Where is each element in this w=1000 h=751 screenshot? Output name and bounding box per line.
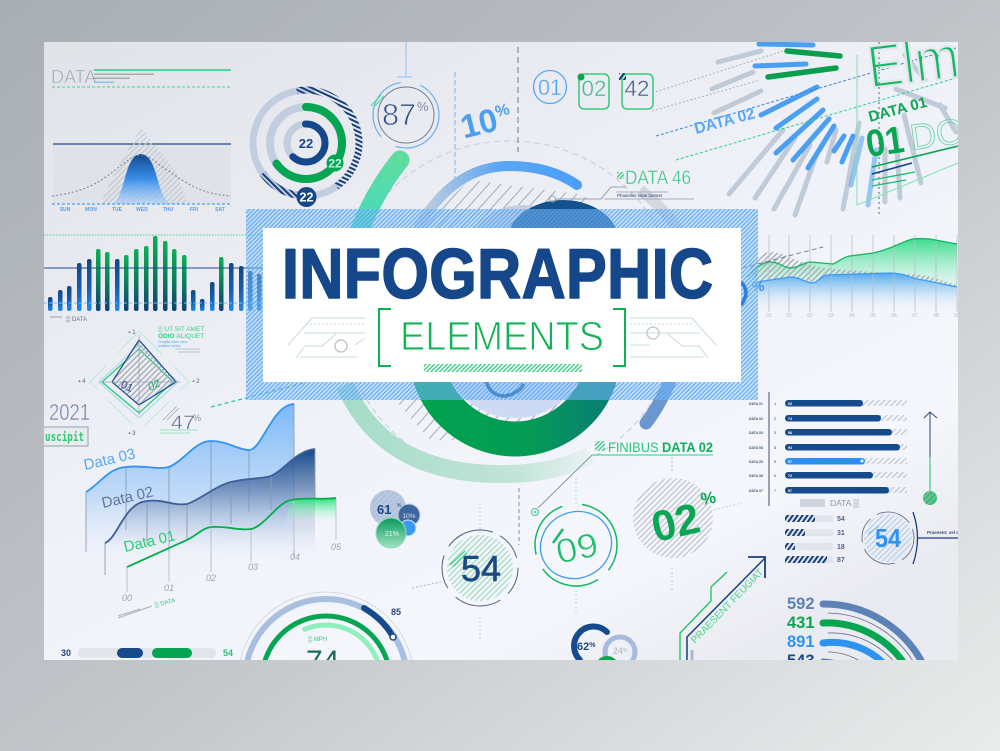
gauge: 87%: %	[417, 99, 429, 114]
vertical arrow	[923, 412, 937, 505]
gauge: 09: 09	[553, 526, 602, 572]
bell curve chart: SAT	[215, 207, 225, 213]
line chart: right: 07	[912, 313, 918, 319]
caption: ut sit amet: ▒ UT SIT AMET	[158, 325, 204, 333]
horizontal bar list: 86	[788, 431, 792, 435]
label: DATA 46 with circuit: Phasellus vitae laoreet	[617, 193, 663, 198]
stat: 47%: 47	[171, 413, 195, 434]
donut chart: 22: 22	[299, 136, 313, 151]
horizontal bar list: 6	[774, 473, 777, 478]
3d area chart: 01	[164, 583, 174, 593]
horizontal bar list: 57	[788, 460, 792, 464]
gauge: 09	[534, 478, 618, 612]
line chart: right: 09	[954, 313, 960, 319]
hatched mini bars: 18	[837, 544, 845, 551]
line chart: right: 03	[828, 313, 834, 319]
gauge: 74	[240, 592, 412, 660]
3d area chart: 02	[206, 573, 216, 583]
dashed diagonal green	[676, 78, 956, 160]
bell curve chart: SUN	[60, 207, 71, 213]
hatched mini bars: 87	[837, 557, 845, 564]
3d area chart: 00	[122, 593, 132, 603]
hatched title band	[246, 209, 758, 400]
caption: ut sit amet	[158, 325, 204, 352]
radial list: 592 431 891 543	[787, 595, 925, 690]
horizontal bar list: 63	[788, 402, 792, 406]
small data tag: ▒ DATA	[154, 597, 176, 609]
dashed diagonal gray	[652, 51, 783, 111]
stat: 2021: 2021	[49, 399, 90, 425]
radar chart: ▪ 4	[78, 379, 86, 385]
radial list: 592 431 891 543: 543	[787, 652, 815, 670]
horizontal bar list: 87	[788, 489, 792, 493]
3d area chart: 04	[290, 552, 300, 562]
gray guide below rings	[518, 488, 520, 545]
line chart: right: %	[752, 278, 765, 294]
title card	[263, 228, 741, 382]
radar chart: 02	[146, 378, 162, 394]
label: FINIBUS DATA 02: FINIBUS DATA 02	[608, 439, 713, 455]
badges: 01 02 42	[534, 70, 653, 109]
stat: 02%: 02	[647, 494, 704, 552]
horizontal bar list: DATA 07	[749, 489, 763, 493]
horizontal bar list: 93	[788, 446, 792, 450]
line chart: right: 01	[786, 313, 792, 319]
title: INFOGRAPHIC: INFOGRAPHIC	[282, 234, 713, 313]
label: FINIBUS DATA 02	[532, 439, 713, 516]
caption: ut sit amet: porttitor metus	[158, 344, 181, 348]
bubbles: 61 10 21	[370, 490, 420, 548]
gauges: 62% 24%	[571, 624, 638, 660]
horizontal bar list: DATA 05	[749, 460, 763, 464]
horizontal bar list: 7	[774, 488, 777, 493]
stat: 47%	[160, 406, 201, 434]
bell curve chart: WED	[136, 207, 148, 213]
horizontal bar list: 74	[788, 417, 792, 421]
horizontal bar list: 5	[774, 459, 777, 464]
stat: 47%: %	[193, 413, 201, 423]
line chart: right: 05	[870, 313, 876, 319]
progress bar: 30 to 54: 30	[61, 648, 71, 658]
gauge: 74: 74	[306, 645, 339, 678]
3d area chart: 05	[331, 542, 342, 552]
radar chart	[78, 330, 200, 437]
bubbles: 61 10 21: 10%	[402, 513, 416, 520]
gauges: 62% 24%: 62	[577, 641, 589, 653]
label: DATA 01 block: 01	[863, 119, 907, 166]
line chart: right: 02	[807, 313, 813, 319]
big label: Elm: Elm	[863, 23, 963, 101]
label: DATA 46 with circuit: DATA 46	[625, 168, 691, 189]
subtitle: ELEMENTS	[379, 309, 625, 372]
progress bar: 30 to 54: 54	[223, 648, 233, 658]
gauge: 74: ▒ MPH	[308, 636, 327, 643]
gauges: 62% 24%: 24	[613, 646, 623, 656]
tag: uscipit: uscipit	[45, 430, 84, 444]
bar chart: left weekly bars	[44, 235, 263, 323]
central concentric rings	[341, 141, 685, 479]
label: DATA 01 block: DOC	[907, 106, 992, 158]
radial list: 592 431 891 543: 891	[787, 633, 815, 651]
horizontal bar list: 1	[774, 401, 777, 406]
gauge: 54 left: 54	[461, 548, 501, 589]
stat: 10%: 10	[457, 101, 501, 145]
bubbles: 61 10 21: 61	[377, 502, 391, 517]
subtitle: ELEMENTS: ELEMENTS	[400, 313, 604, 359]
arrow: PRAESENT FEUGIAT: PRAESENT FEUGIAT	[689, 567, 766, 646]
horizontal bar list: DATA 01	[749, 402, 763, 406]
dashed diagonals	[656, 48, 956, 136]
stat: 02%	[633, 457, 742, 590]
label: DATA 02: DATA 02	[693, 105, 757, 138]
hatched mini bars	[785, 515, 845, 564]
circuit ornament left	[288, 318, 365, 358]
hatched mini bars: 54	[837, 516, 845, 523]
horizontal bar list: 73	[788, 474, 792, 478]
header: DATA with lines: DATA	[51, 67, 96, 87]
line chart: right	[742, 235, 960, 319]
3d area chart: 03	[248, 562, 258, 572]
bell curve chart	[52, 128, 231, 213]
radial list: 592 431 891 543: 431	[787, 614, 815, 632]
radial burst chart	[712, 44, 956, 215]
gauge: 74: 85	[391, 607, 401, 617]
horizontal bar list: DATA 03	[749, 431, 763, 435]
horizontal bar list: 2	[774, 416, 777, 421]
horizontal bar list: DATA ▒	[830, 498, 859, 508]
tag: uscipit	[40, 427, 88, 446]
circuit ornament right	[630, 318, 716, 358]
gauge: 54 left	[412, 503, 518, 640]
stat: 02%: %	[699, 488, 717, 509]
caption: ut sit amet: ODIO ALIQUET	[158, 333, 204, 340]
badges: 01 02 42: 01	[538, 75, 562, 100]
radar chart: ▪ 2	[192, 379, 200, 385]
badges: 01 02 42: 42	[624, 76, 650, 101]
gauge: 87%	[371, 42, 439, 148]
small data tag	[118, 597, 176, 618]
stat: 10%: %	[493, 101, 511, 121]
arrow: PRAESENT FEUGIAT	[680, 557, 766, 660]
donut chart: 22: 22	[328, 156, 342, 170]
gauge: 54 right: Praesent: vel a	[927, 530, 959, 535]
radar chart: ▪ 3	[128, 431, 136, 437]
gauges: 62% 24%: %	[589, 642, 596, 649]
gauge: 54 right	[862, 512, 959, 564]
donut chart: 22	[250, 86, 363, 207]
progress bar: 30 to 54	[61, 648, 233, 658]
horizontal bar list: DATA 06	[749, 474, 763, 478]
teal dashed pointer	[211, 383, 304, 407]
gauge: 87%: 87	[382, 97, 416, 132]
radar chart: 01	[119, 379, 135, 395]
radar chart: ▪ 1	[128, 330, 136, 336]
radial list: 592 431 891 543: 592	[787, 595, 815, 613]
line chart: right: 04	[849, 313, 855, 319]
main panel	[44, 42, 958, 660]
horizontal bar list: 3	[774, 430, 777, 435]
3d area chart	[82, 404, 342, 603]
gauge: 54 right: 54	[875, 523, 901, 553]
3d area chart: Data 01	[122, 528, 177, 556]
donut chart: 22: 22	[300, 190, 313, 204]
horizontal bar list	[749, 392, 907, 508]
gauges: 62% 24%: %	[623, 648, 628, 654]
bell curve chart: THU	[163, 207, 174, 213]
bubbles: 61 10 21: 21%	[385, 531, 399, 538]
bell curve chart: TUE	[112, 207, 123, 213]
label: DATA 01 block: DATA 01	[867, 94, 929, 126]
3d area chart: Data 02	[100, 484, 155, 512]
horizontal bar list: DATA 02	[749, 417, 763, 421]
horizontal bar list: 8	[774, 445, 777, 450]
3d area chart: Data 03	[82, 446, 137, 474]
stat: 10%	[462, 104, 510, 138]
bell curve chart: MON	[85, 207, 97, 213]
label: DATA 46 with circuit	[550, 168, 694, 202]
caption: ut sit amet: Fringilla diam nunc	[158, 340, 188, 344]
bar chart: left weekly bars: ▒ DATA	[66, 316, 87, 323]
label: DATA 01 block	[856, 42, 958, 214]
vertical gray guide	[517, 47, 519, 152]
blue zero fragment on band	[741, 282, 746, 305]
badges: 01 02 42: 02	[582, 76, 606, 101]
bell curve chart: FRI	[190, 207, 199, 213]
line chart: right: 06	[891, 313, 897, 319]
bubbles: 61 10 21: %	[397, 503, 402, 509]
line chart: right: 01	[766, 313, 772, 319]
hatched mini bars: 31	[837, 530, 845, 537]
line chart: right: 08	[933, 313, 939, 319]
vertical guides	[454, 72, 456, 180]
horizontal bar list: DATA 08	[749, 446, 763, 450]
